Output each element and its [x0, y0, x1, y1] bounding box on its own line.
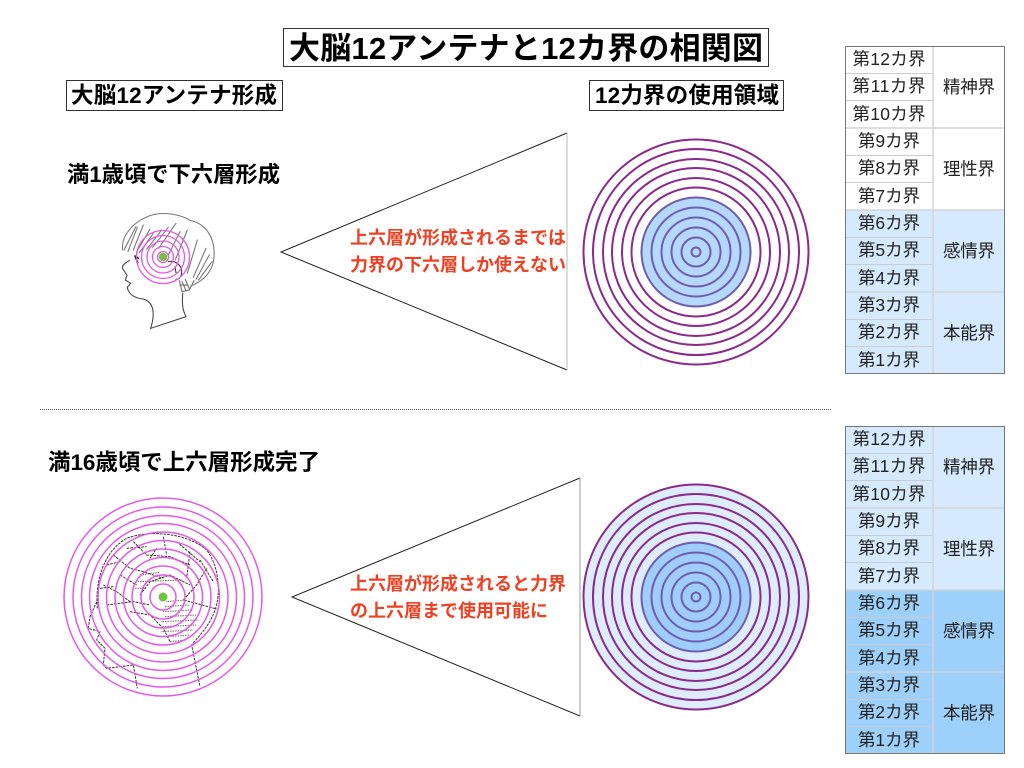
callout: before upper layer: 力界の下六層しか使えない: [350, 255, 566, 275]
table: lower force levels: 第12カ界: [852, 429, 926, 449]
arrow: upper expansion triangle: [281, 133, 567, 370]
table: lower force levels: 第4カ界: [858, 648, 920, 668]
table: lower force levels: 第6カ界: [858, 593, 920, 613]
table: upper force levels: 第4カ界: [858, 268, 920, 288]
table: lower force levels: 第5カ界: [858, 620, 920, 640]
table: lower force levels: 第9カ界: [858, 511, 920, 531]
table: lower force levels: 理性界: [943, 539, 995, 559]
arrow: lower expansion triangle: [292, 478, 580, 716]
table: upper force levels: 第8カ界: [858, 158, 920, 178]
heading: age 1: 満1歳頃で下六層形成: [67, 162, 280, 187]
table: upper force levels: 第2カ界: [858, 322, 920, 342]
chart: lower concentric force field rings: [584, 484, 808, 710]
table: upper force levels: 第12カ界: [852, 49, 926, 69]
table: lower force levels: 第10カ界: [852, 484, 926, 504]
table: upper force levels: [845, 46, 1005, 374]
chart: upper concentric force field rings: [584, 140, 808, 364]
table: upper force levels: 第6カ界: [858, 213, 920, 233]
table: lower force levels: 第8カ界: [858, 538, 920, 558]
divider: [40, 408, 831, 410]
callout: after upper layer: 上六層が形成されると力界: [350, 573, 566, 594]
table: upper force levels: 感情界: [943, 241, 995, 261]
callout: after upper layer: の上六層まで使用可能に: [350, 601, 548, 621]
table: upper force levels: 精神界: [943, 77, 995, 97]
table: upper force levels: 第10カ界: [852, 104, 926, 124]
table: lower force levels: 第2カ界: [858, 702, 920, 722]
table: lower force levels: 第3カ界: [858, 675, 920, 695]
table: lower force levels: 第1カ界: [858, 730, 920, 750]
table: lower force levels: 精神界: [943, 457, 995, 477]
heading: age 16: 満16歳頃で上六層形成完了: [48, 450, 320, 475]
table: upper force levels: 第1カ界: [858, 350, 920, 370]
table: lower force levels: 感情界: [943, 621, 995, 641]
table: lower force levels: 第7カ界: [858, 566, 920, 586]
heading: usage area: 12力界の使用領域: [595, 83, 779, 108]
table: upper force levels: 第7カ界: [858, 186, 920, 206]
illustration: child head with antenna rings: [122, 214, 214, 328]
table: lower force levels: [845, 426, 1005, 754]
callout: after upper layer: [350, 573, 566, 621]
title: 大脳12アンテナと12カ界の相関図: [289, 31, 763, 66]
table: upper force levels: 第9カ界: [858, 131, 920, 151]
table: lower force levels: 本能界: [943, 703, 995, 723]
illustration: adult head with antenna rings: [64, 498, 262, 696]
callout: before upper layer: [350, 227, 566, 275]
table: upper force levels: 第3カ界: [858, 295, 920, 315]
table: lower force levels: 第11カ界: [852, 456, 926, 476]
heading: antenna formation: 大脳12アンテナ形成: [71, 83, 277, 108]
table: upper force levels: 第11カ界: [852, 76, 926, 96]
table: upper force levels: 本能界: [943, 323, 995, 343]
table: upper force levels: 理性界: [943, 159, 995, 179]
table: upper force levels: 第5カ界: [858, 240, 920, 260]
callout: before upper layer: 上六層が形成されるまでは: [350, 227, 566, 248]
